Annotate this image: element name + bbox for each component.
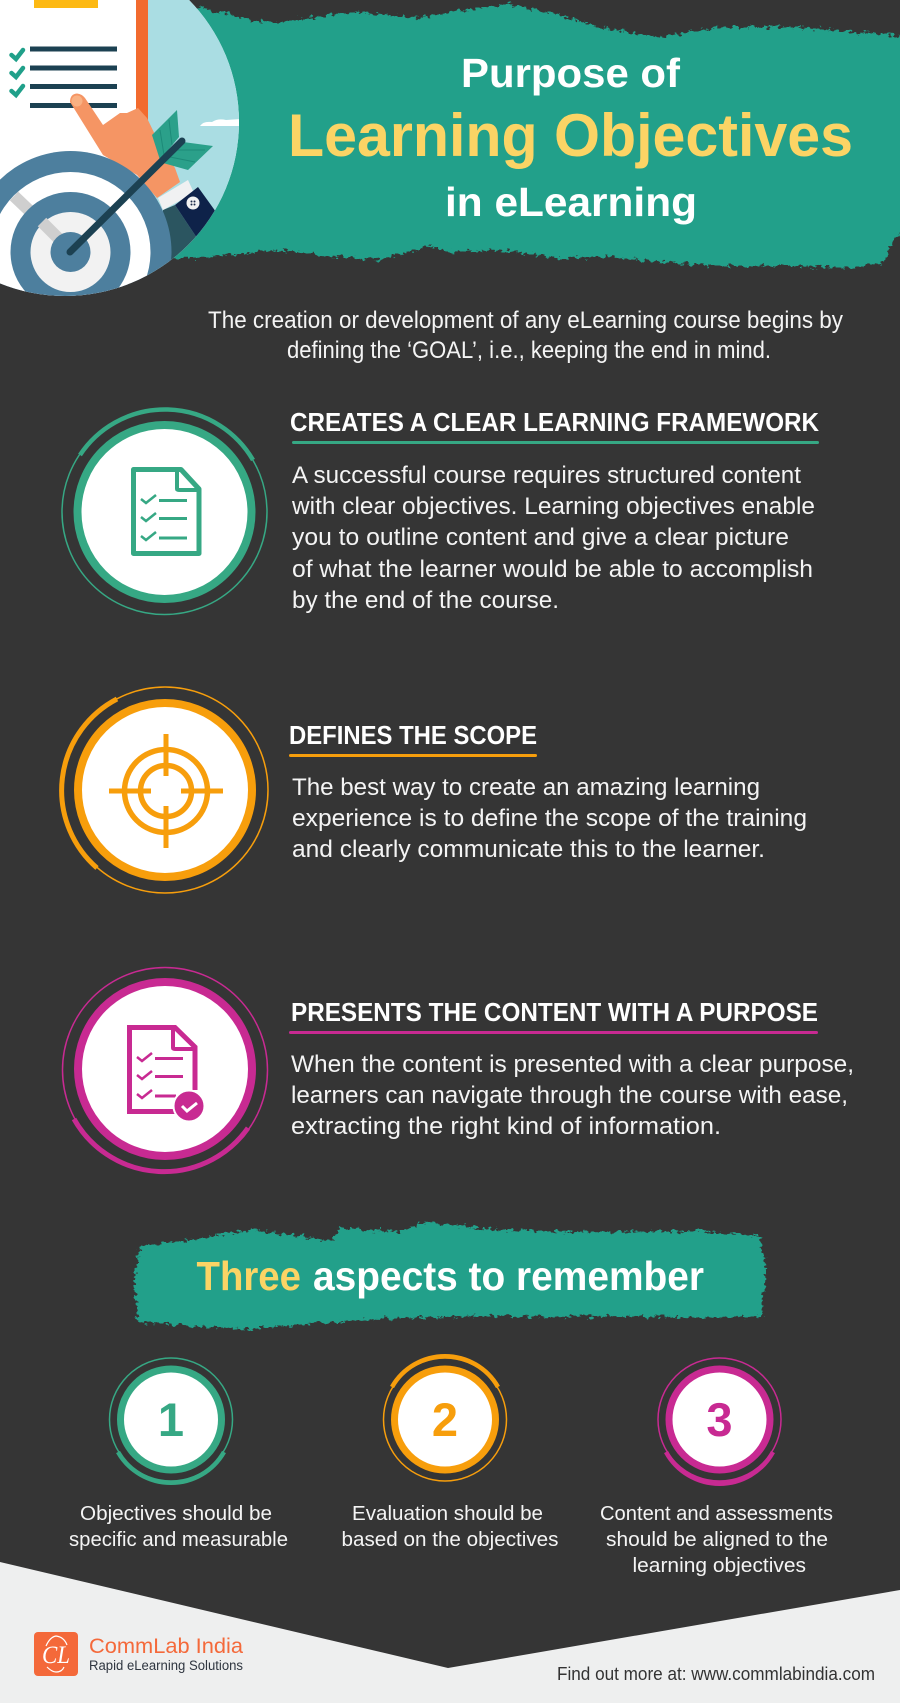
- caption 2: Evaluation should be: [352, 1503, 543, 1525]
- title banner: brush stroke: [150, 4, 900, 268]
- title: Purpose of: [461, 50, 680, 96]
- intro text: defining the ‘GOAL’, i.e., keeping the end in mind.: [287, 337, 771, 364]
- logo: CommLab India: [34, 1632, 243, 1676]
- heading underline: [292, 441, 819, 444]
- caption 3: [600, 1503, 833, 1577]
- badge: green circle: [62, 409, 267, 614]
- caption 2: [342, 1503, 558, 1551]
- jacket cuff: [175, 187, 216, 238]
- footer link: Find out more at: www.commlabindia.com: [557, 1664, 875, 1684]
- caption 1: Objectives should be: [80, 1503, 272, 1525]
- title: [288, 50, 853, 225]
- body text: The best way to create an amazing learning: [292, 774, 760, 801]
- body text: When the content is presented with a clear purpose,: [291, 1051, 854, 1078]
- caption 2: based on the objectives: [342, 1529, 558, 1551]
- orange strip: [136, 0, 148, 125]
- caption 3: Content and assessments: [600, 1503, 833, 1525]
- panel: presents the content with a purpose: [62, 968, 854, 1172]
- target: [0, 151, 172, 296]
- number badge 2: 2: [432, 1393, 458, 1446]
- caption 1: [69, 1503, 288, 1551]
- body text: A successful course requires structured content: [292, 462, 801, 489]
- icon: approved document: [130, 1027, 204, 1122]
- section heading: Three: [196, 1253, 301, 1299]
- aspect 1: [69, 1358, 288, 1551]
- intro text: The creation or development of any eLearning course begins by: [208, 307, 843, 334]
- panel: defines the scope: [62, 687, 807, 893]
- body text: and clearly communicate this to the learner.: [292, 836, 765, 863]
- aspect 2: [342, 1356, 558, 1551]
- body text: [291, 1051, 854, 1140]
- title: Learning Objectives: [288, 102, 853, 169]
- panel: creates a clear learning framework: [62, 407, 819, 614]
- icon: document checklist: [134, 469, 199, 554]
- body text: by the end of the course.: [292, 587, 559, 614]
- number badge 3: [658, 1358, 781, 1484]
- title: in eLearning: [445, 179, 697, 225]
- badge: magenta circle: [62, 968, 268, 1172]
- logo mark: [34, 1632, 78, 1676]
- aspect 3: [600, 1358, 833, 1577]
- caption 3: should be aligned to the: [606, 1529, 828, 1551]
- cloud: [200, 119, 240, 126]
- heading: CREATES A CLEAR LEARNING FRAMEWORK: [290, 407, 819, 437]
- body text: of what the learner would be able to accomplish: [292, 556, 813, 583]
- logo mark: CL: [42, 1642, 70, 1669]
- shirt cuff: [158, 180, 194, 210]
- logo name: CommLab India: [89, 1635, 243, 1658]
- heading: DEFINES THE SCOPE: [289, 720, 537, 750]
- jacket sleeve: [162, 205, 196, 261]
- checklist ticks: [12, 50, 23, 95]
- body text: [291, 462, 815, 614]
- heading: PRESENTS THE CONTENT WITH A PURPOSE: [291, 997, 818, 1027]
- cuff button: [186, 196, 200, 210]
- body text: you to outline content and give a clear picture: [292, 524, 789, 551]
- pointing hand: [70, 94, 180, 198]
- intro text: [208, 307, 843, 364]
- heading underline: [289, 754, 537, 757]
- number badge 3: 3: [706, 1393, 733, 1446]
- illustration: hand, target and arrow: [0, 0, 239, 296]
- icon: crosshair: [109, 734, 223, 848]
- body text: experience is to define the scope of the training: [292, 805, 807, 832]
- yellow tab: [34, 0, 98, 8]
- body text: learners can navigate through the course with ease,: [291, 1082, 848, 1109]
- body text: [292, 774, 807, 863]
- body text: extracting the right kind of information.: [291, 1113, 721, 1140]
- heading underline: [289, 1031, 818, 1034]
- footer background: [0, 1562, 900, 1703]
- logo tagline: Rapid eLearning Solutions: [89, 1658, 243, 1673]
- checklist lines: [30, 46, 117, 108]
- section banner: brush stroke: [134, 1222, 766, 1329]
- caption 1: specific and measurable: [69, 1529, 288, 1551]
- body text: with clear objectives. Learning objectives enable: [291, 493, 815, 520]
- number badge 1: [110, 1358, 232, 1483]
- number badge 1: 1: [158, 1393, 184, 1446]
- number badge 2: [384, 1356, 506, 1481]
- sky: [148, 0, 240, 298]
- arrow fletching: [152, 110, 213, 170]
- section heading: aspects to remember: [313, 1253, 704, 1299]
- arrow shaft: [70, 141, 182, 252]
- caption 3: learning objectives: [632, 1555, 806, 1577]
- badge: orange circle: [62, 687, 268, 893]
